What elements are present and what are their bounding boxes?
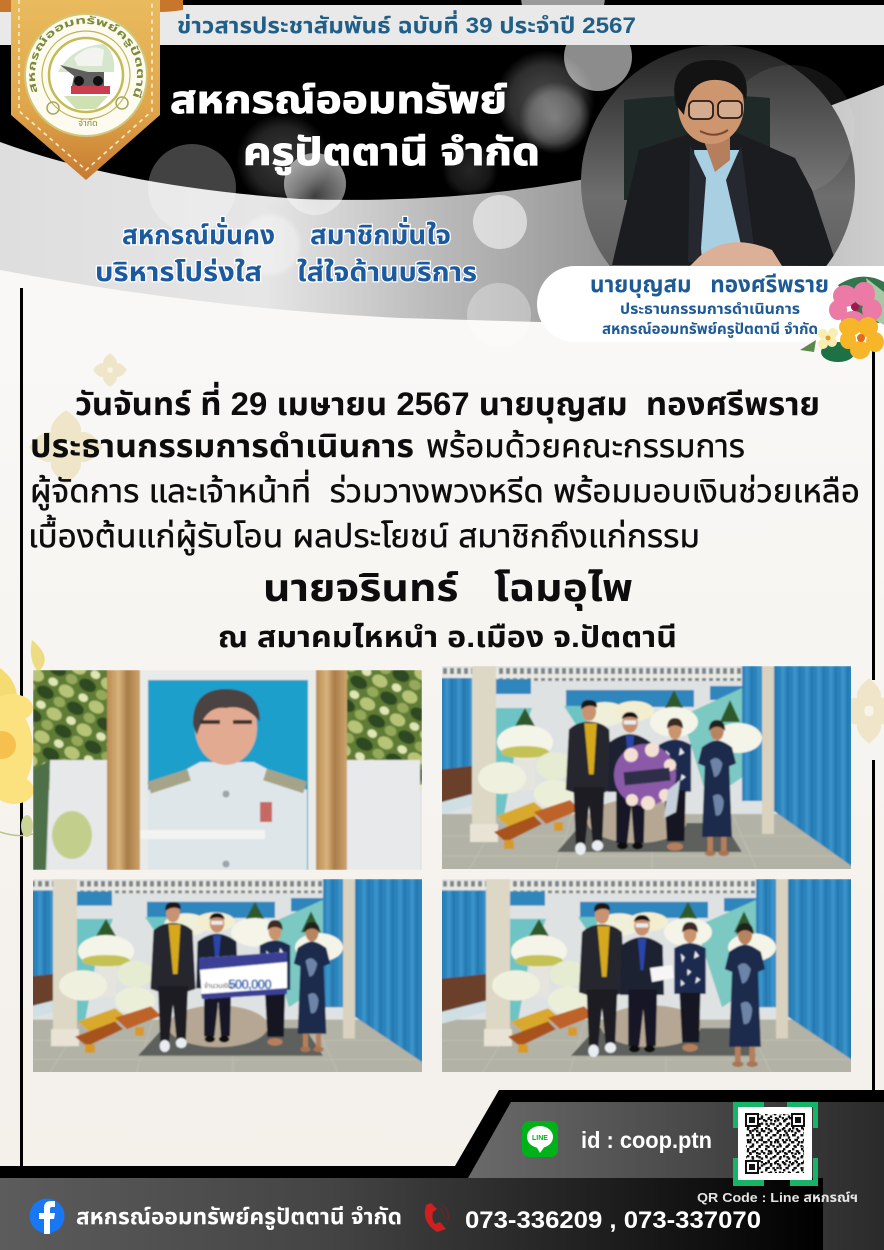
slogans <box>95 217 477 287</box>
footer: black frame <box>0 1090 884 1250</box>
name plate: สหกรณ์ออมทรัพย์ครูปัตตานี จำกัด <box>602 321 818 339</box>
cheque board <box>199 952 287 999</box>
facebook page name: สหกรณ์ออมทรัพย์ครูปัตตานี จำกัด <box>76 1204 402 1230</box>
qr caption: QR Code : Line สหกรณ์ฯ <box>697 1190 858 1205</box>
title: ครูปัตตานี จำกัด <box>243 132 540 175</box>
slogans: บริหารโปร่งใส <box>95 257 262 287</box>
envelope <box>650 965 674 982</box>
footer: contact panel <box>468 1102 884 1250</box>
news body text: ผู้จัดการ และเจ้าหน้าที่ ร่วมวางพวงหรีด พร้อมมอบเงินช่วยเหลือ <box>30 469 860 511</box>
line id: id : coop.ptn <box>581 1127 712 1153</box>
top band <box>0 5 884 45</box>
venue line: ณ สมาคมไหหนำ อ.เมือง จ.ปัตตานี <box>218 622 677 654</box>
footer: bottom bar <box>0 1178 823 1250</box>
side rules <box>20 288 875 1166</box>
newsletter heading: ข่าวสารประชาสัมพันธ์ ฉบับที่ 39 ประจำปี 2567 <box>177 10 636 38</box>
cheque board: จำนวนเงิน <box>204 982 232 990</box>
name plate <box>537 266 884 342</box>
coop logo <box>24 13 148 137</box>
title <box>170 80 540 175</box>
title: สหกรณ์ออมทรัพย์ <box>170 80 507 122</box>
coop logo: สหกรณ์ออมทรัพย์ครูปัตตานี <box>29 16 143 98</box>
news body text: พร้อมด้วยคณะกรรมการ <box>426 428 745 464</box>
decorative ornament right <box>840 678 884 744</box>
qr code <box>733 1102 818 1186</box>
coop logo: จำกัด <box>78 118 98 128</box>
cheque board: 500,000 <box>228 976 272 992</box>
portrait of chairman <box>581 45 855 266</box>
yellow flower decoration left <box>0 640 45 837</box>
news body text: เบื้องต้นแก่ผู้รับโอน ผลประโยชน์ สมาชิกถึงแก่กรรม <box>28 514 700 556</box>
icon: line: LINE <box>532 1135 548 1142</box>
slogans: ใส่ใจด้านบริการ <box>297 257 477 287</box>
deceased member name: นายจรินทร์ โฉมอุไพ <box>263 568 633 611</box>
name plate: นายบุญสม ทองศรีพราย <box>590 271 829 298</box>
slogans: สมาชิกมั่นใจ <box>310 217 451 250</box>
icon: phone <box>425 1203 448 1232</box>
slogans: สหกรณ์มั่นคง <box>122 217 275 250</box>
photo: portrait of deceased <box>33 670 422 870</box>
icon: facebook <box>30 1198 64 1234</box>
icon: line <box>522 1121 558 1157</box>
bokeh circles <box>148 0 632 347</box>
name plate: ประธานกรรมการดำเนินการ <box>620 301 800 318</box>
decorative ornaments <box>29 353 127 484</box>
coop badge <box>0 0 183 180</box>
wreath <box>614 743 680 818</box>
photo: handing envelope <box>442 879 851 1072</box>
header: gray swoosh <box>0 60 884 322</box>
phone numbers: 073-336209 , 073-337070 <box>465 1207 761 1234</box>
news body text <box>28 381 860 556</box>
news body text: วันจันทร์ ที่ 29 เมษายน 2567 นายบุญสม ทองศรีพราย <box>75 381 820 423</box>
photo: presenting wreath <box>442 666 851 869</box>
photo: presenting cheque board <box>33 879 422 1072</box>
icon: tropical flowers <box>800 277 884 362</box>
news body text: ประธานกรรมการดำเนินการ <box>30 428 414 464</box>
header: black swoosh <box>0 0 884 200</box>
